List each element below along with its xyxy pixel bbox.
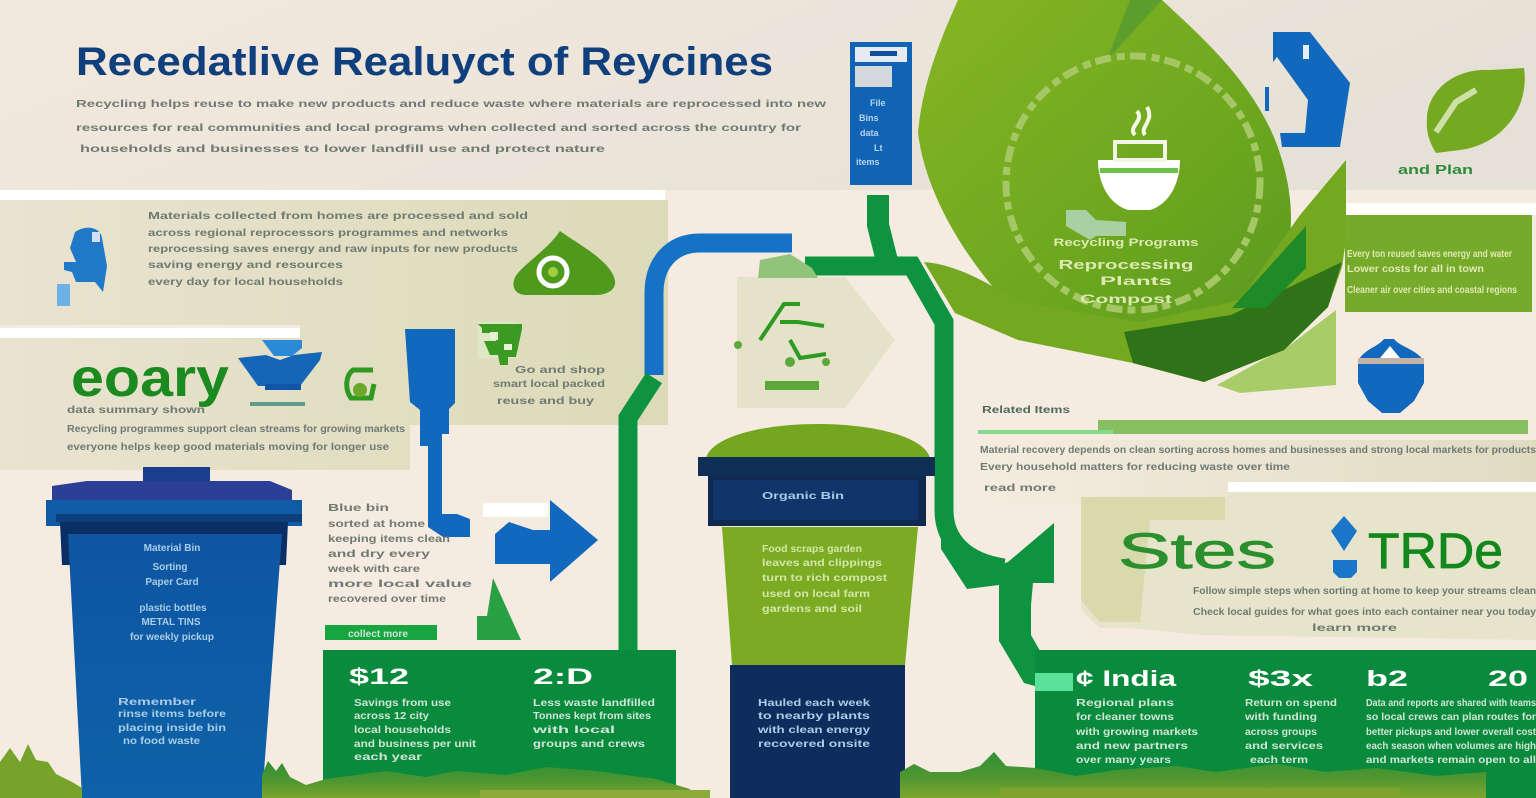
stat c: b2	[1366, 666, 1408, 691]
text lines: data summary shown	[67, 405, 205, 416]
leaf text: Plants	[1100, 274, 1173, 288]
steps text: Follow simple steps when sorting at home to keep your streams clean	[1193, 586, 1536, 597]
white strip	[1228, 482, 1536, 492]
stat 2: groups and crews	[533, 739, 646, 750]
icon: white bowl	[1098, 107, 1180, 210]
green bin	[698, 424, 935, 798]
bin label	[130, 543, 214, 643]
leaf highlight	[1107, 0, 1162, 60]
navy text: recovered onsite	[758, 739, 871, 750]
blue device panel: Lt	[874, 143, 882, 153]
text lines: Recycling programmes support clean streams for growing markets	[67, 424, 405, 435]
text lines	[67, 405, 405, 453]
white divider right	[1346, 203, 1536, 215]
stat a	[1075, 666, 1199, 766]
blue device panel: Bins	[859, 113, 879, 123]
blue device panel: data	[860, 128, 880, 138]
leaf sprout	[1066, 210, 1126, 240]
header band	[0, 0, 1536, 190]
bin notes: no food waste	[123, 736, 200, 747]
icon: green leaf badge	[513, 231, 615, 295]
side text beside blue bin: sorted at home	[328, 519, 426, 530]
blue device panel: File	[870, 98, 886, 108]
stat a: for cleaner towns	[1076, 712, 1175, 723]
panel text: across regional reprocessors programmes and networks	[148, 228, 509, 239]
pale leaf	[1217, 310, 1336, 393]
cart text	[493, 365, 605, 407]
lower wrap leaf	[924, 160, 1346, 382]
icon: small leaf	[1398, 68, 1525, 177]
blue device panel	[850, 42, 912, 185]
title: Recedatlive Realuyct of Reycines	[76, 40, 773, 84]
green connector top and down	[805, 195, 1004, 568]
side text beside blue bin: recovered over time	[328, 594, 447, 605]
green tag	[325, 625, 437, 640]
icon: blue shield	[1358, 339, 1424, 413]
arrow: blue pipe	[405, 329, 470, 537]
green highlight bar	[978, 420, 1528, 434]
stat a: over many years	[1076, 755, 1172, 766]
bin notes: Remember	[118, 697, 196, 708]
panel: right text block	[978, 405, 1536, 505]
bin notes: placing inside bin	[118, 723, 226, 734]
panel: right green: Lower costs for all in town	[1347, 264, 1484, 275]
ring	[1006, 56, 1260, 310]
stat 1: $12	[349, 664, 409, 689]
steps text: learn more	[1312, 623, 1398, 634]
stat a: and new partners	[1076, 741, 1189, 752]
steps heading 2: TRDe	[1368, 523, 1503, 579]
icon: small leaf: and Plan	[1398, 162, 1473, 177]
panel text	[148, 211, 528, 288]
stat c: each season when volumes are high	[1366, 741, 1536, 752]
stat 2	[531, 664, 655, 750]
icon: green triangle	[477, 578, 521, 640]
panel: steps	[1081, 482, 1536, 640]
leaf text: Reprocessing	[1058, 257, 1194, 272]
stat c: and markets remain open to all	[1366, 755, 1536, 766]
icon: blue drop	[1331, 516, 1357, 578]
cart text: reuse and buy	[497, 396, 595, 407]
navy text: Hauled each week	[758, 698, 871, 709]
panel text: saving energy and resources	[148, 260, 344, 271]
panel: right text block: read more	[984, 483, 1057, 494]
stat b: $3x	[1248, 666, 1314, 691]
icon: blue recycling cap	[238, 340, 322, 406]
green bin text: leaves and clippings	[762, 558, 883, 569]
green tag: collect more	[348, 629, 408, 640]
bin notes	[118, 697, 227, 747]
bin label: for weekly pickup	[130, 632, 214, 643]
panel: right text block: Related Items	[982, 405, 1071, 416]
stat 2: Tonnes kept from sites	[533, 711, 651, 722]
heading: green word: eoary	[71, 348, 229, 408]
stat c: so local crews can plan routes for	[1366, 712, 1536, 723]
side text beside blue bin: week with care	[327, 564, 421, 575]
panel: flow chart card	[734, 254, 895, 408]
stat 2: with local	[531, 725, 615, 736]
stat c: 20	[1488, 666, 1528, 691]
side text beside blue bin: Blue bin	[328, 503, 389, 514]
panel: right green stats	[1035, 650, 1536, 798]
panel: left green stats	[323, 650, 676, 798]
panel text: reprocessing saves energy and raw inputs for new products	[148, 244, 519, 255]
intro text: resources for real communities and local programs when collected and sorted across the country for	[76, 123, 801, 134]
panel text: every day for local households	[148, 277, 344, 288]
side text beside blue bin: and dry every	[328, 549, 431, 560]
stat 2: Less waste landfilled	[533, 698, 655, 709]
bin label: METAL TINS	[141, 617, 201, 628]
side text beside blue bin: more local value	[328, 579, 473, 590]
bin notes: rinse items before	[118, 709, 227, 720]
navy text: with clean energy	[757, 725, 871, 736]
white divider	[0, 190, 665, 200]
stat 1	[349, 664, 477, 763]
stat b: Return on spend	[1245, 698, 1337, 709]
main leaf blade	[918, 0, 1291, 335]
steps text: Check local guides for what goes into each container near you today	[1193, 607, 1536, 618]
green bin text: gardens and soil	[762, 604, 862, 615]
arrow: green curved arrow	[941, 515, 1070, 693]
steps heading: Stes	[1118, 523, 1276, 579]
green bin text: turn to rich compost	[762, 573, 888, 584]
green bin text: Food scraps garden	[762, 544, 862, 555]
icon: green cart	[478, 322, 522, 365]
icon: blue loop	[1265, 32, 1350, 147]
navy text: to nearby plants	[758, 711, 871, 722]
dark leaf fold	[1124, 262, 1342, 382]
intro text: Recycling helps reuse to make new products and reduce waste where materials are reprocessed into new	[76, 99, 826, 110]
mid leaf fold	[1232, 226, 1306, 308]
intro text	[76, 99, 826, 155]
leaf text	[1054, 237, 1198, 306]
blue bin	[46, 467, 302, 798]
side text beside blue bin	[327, 503, 473, 605]
panel: right text block: Every household matters for reducing waste over time	[980, 462, 1291, 473]
stat a: with growing markets	[1075, 727, 1199, 738]
large green leaf	[918, 0, 1346, 393]
leaf text: Compost	[1080, 292, 1172, 306]
stat 1: across 12 city	[354, 711, 429, 722]
stat b: with funding	[1244, 712, 1317, 723]
blue device panel: items	[856, 157, 880, 167]
icon: blue person	[57, 228, 107, 306]
stat a: ¢ India	[1076, 666, 1177, 691]
text lines: everyone helps keep good materials moving for longer use	[67, 442, 390, 453]
panel: middle left	[0, 322, 668, 470]
side text beside blue bin: keeping items clean	[328, 534, 450, 545]
panel: right text block: Material recovery depends on clean sorting across homes and businesses and strong local markets for products	[980, 445, 1536, 456]
stat b: and services	[1245, 741, 1324, 752]
bin label: Material Bin	[144, 543, 200, 554]
arrow: blue and green connector	[628, 243, 792, 653]
small dots	[734, 341, 830, 390]
stat a: Regional plans	[1076, 698, 1175, 709]
bin label: plastic bottles	[139, 603, 207, 614]
arrow: blue right arrow	[483, 500, 598, 582]
cart text: smart local packed	[493, 379, 605, 390]
steps text	[1193, 586, 1536, 634]
flow icon	[760, 304, 826, 358]
green bin text	[762, 544, 888, 615]
icon: green recycle	[347, 370, 374, 398]
stat b	[1244, 666, 1337, 766]
panel: right green	[1345, 215, 1532, 312]
leaf text: Recycling Programs	[1054, 237, 1198, 249]
green bin text: used on local farm	[762, 589, 870, 600]
stat 1: and business per unit	[354, 739, 477, 750]
panel text: Materials collected from homes are processed and sold	[148, 211, 528, 222]
stat c	[1366, 666, 1536, 766]
green bin: Organic Bin	[762, 491, 844, 502]
stat 1: local households	[354, 725, 452, 736]
stat b: each term	[1250, 755, 1308, 766]
grass	[0, 744, 1486, 798]
white divider 2	[0, 328, 300, 338]
stat 2: 2:D	[533, 664, 593, 689]
navy text	[757, 698, 871, 750]
stat 1: Savings from use	[354, 698, 452, 709]
cart text: Go and shop	[515, 365, 605, 376]
stat 1: each year	[354, 752, 422, 763]
panel: upper left	[0, 200, 668, 325]
bin label: Sorting	[152, 562, 188, 573]
bin label: Paper Card	[145, 577, 199, 588]
intro text: households and businesses to lower landfill use and protect nature	[80, 144, 606, 155]
stat b: across groups	[1245, 727, 1317, 738]
